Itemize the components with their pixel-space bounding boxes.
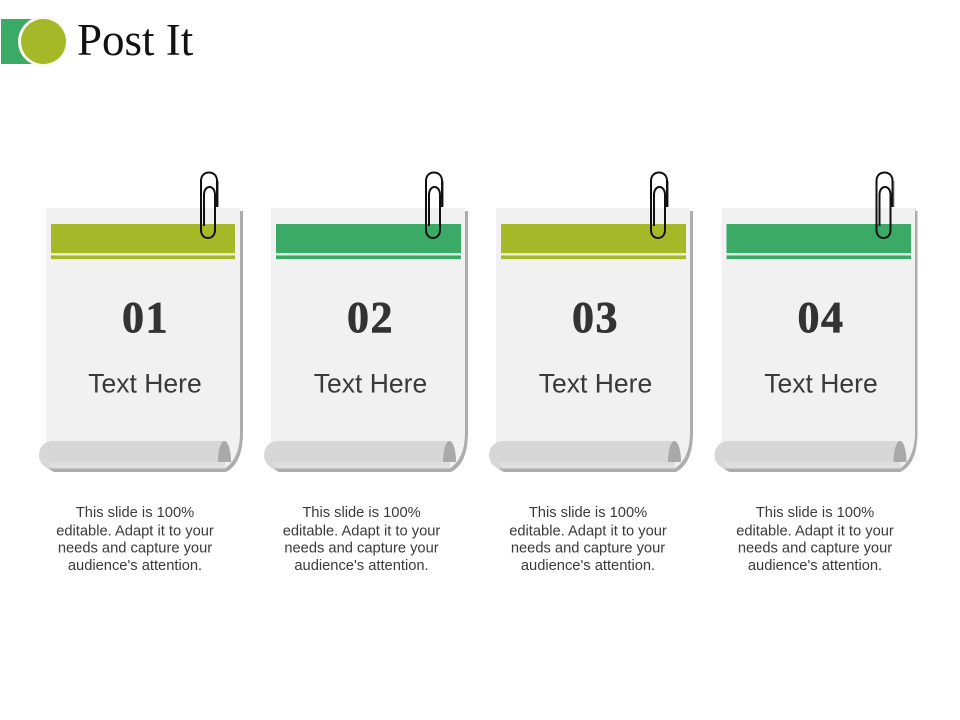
- icon: paperclip: [201, 172, 218, 238]
- note paper: [39, 208, 243, 472]
- panel: note 01: [39, 172, 243, 574]
- note paper: [714, 208, 918, 472]
- icon: paperclip: [876, 172, 894, 238]
- description: This slide is 100%: [529, 505, 647, 521]
- description: This slide is 100%: [756, 505, 874, 521]
- header band: [276, 224, 461, 260]
- subheading: Text Here: [764, 368, 878, 398]
- note paper: [264, 208, 468, 472]
- header band: [51, 224, 235, 260]
- number: 02: [347, 293, 394, 342]
- description: audience's attention.: [68, 558, 202, 574]
- icon: paperclip: [426, 172, 444, 238]
- icon: title badge: [1, 16, 68, 66]
- number: 04: [798, 293, 844, 342]
- description: needs and capture your: [738, 540, 892, 556]
- panel: note 02: [264, 172, 468, 574]
- note paper: [489, 208, 693, 472]
- description: needs and capture your: [511, 540, 665, 556]
- subheading: Text Here: [314, 368, 427, 398]
- icon: paperclip: [651, 172, 668, 238]
- description: editable. Adapt it to your: [509, 524, 667, 540]
- panel: note 03: [489, 172, 693, 574]
- number: 03: [572, 293, 619, 342]
- description: editable. Adapt it to your: [283, 524, 440, 540]
- description: editable. Adapt it to your: [736, 524, 894, 540]
- description: audience's attention.: [521, 558, 655, 574]
- subheading: Text Here: [88, 368, 202, 398]
- subheading: Text Here: [539, 368, 652, 398]
- description: editable. Adapt it to your: [56, 524, 214, 540]
- header band: [501, 224, 686, 260]
- description: needs and capture your: [284, 540, 439, 556]
- description: This slide is 100%: [302, 505, 421, 521]
- number: 01: [122, 293, 169, 342]
- description: audience's attention.: [748, 558, 882, 574]
- header band: [726, 224, 911, 260]
- panel: note 04: [714, 172, 918, 574]
- title: Post It: [77, 15, 194, 65]
- description: audience's attention.: [294, 558, 429, 574]
- description: needs and capture your: [58, 540, 212, 556]
- description: This slide is 100%: [76, 505, 194, 521]
